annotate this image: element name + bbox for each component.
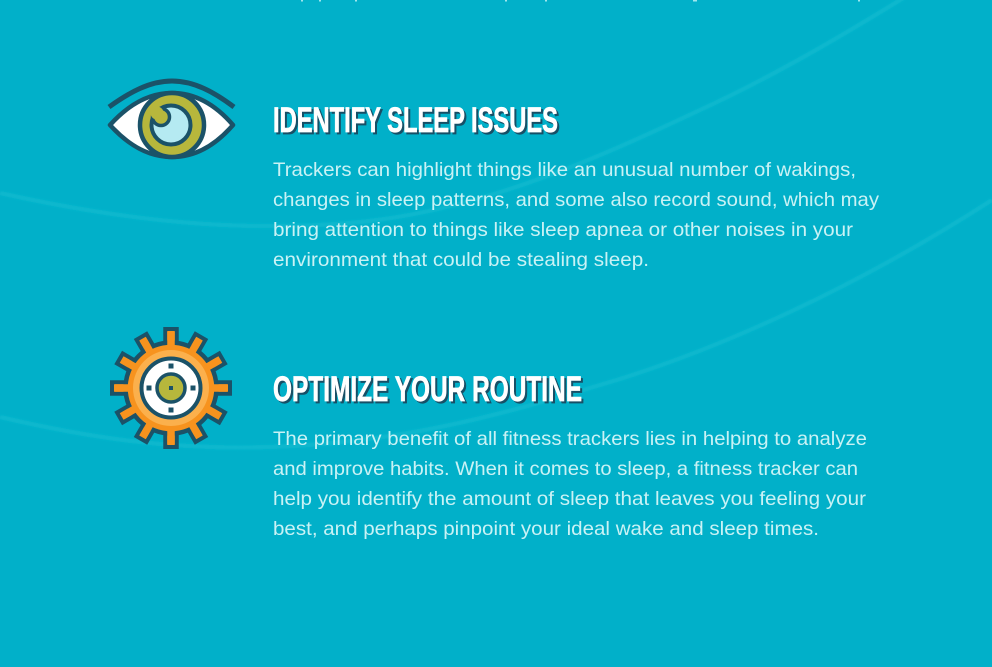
text block: identify sleep issues <box>273 159 879 271</box>
text block: identify sleep issues: bring attention to things like sleep apnea or other noises in your <box>273 219 854 241</box>
text block: identify sleep issues: environment that could be stealing sleep. <box>273 249 649 271</box>
icon: eye <box>109 81 234 157</box>
text block: identify sleep issues: changes in sleep patterns, and some also record sound, which may <box>273 189 879 211</box>
icon: gear <box>112 329 230 447</box>
text block: optimize your routine: and improve habits. When it comes to sleep, a fitness tracker can <box>273 458 858 480</box>
heading: optimize your routine: OPTIMIZE YOUR ROUTINE <box>273 370 582 409</box>
text block: identify sleep issues: Trackers can highlight things like an unusual number of wakings, <box>273 159 856 181</box>
text block: optimize your routine: help you identify the amount of sleep that leaves you feeling your <box>273 488 867 510</box>
heading: identify sleep issues: IDENTIFY SLEEP ISSUES <box>273 101 558 140</box>
text block: optimize your routine: best, and perhaps pinpoint your ideal wake and sleep times. <box>273 518 819 540</box>
text block: optimize your routine <box>273 428 867 540</box>
text block: optimize your routine: The primary benefit of all fitness trackers lies in helping to analyze <box>273 428 867 450</box>
